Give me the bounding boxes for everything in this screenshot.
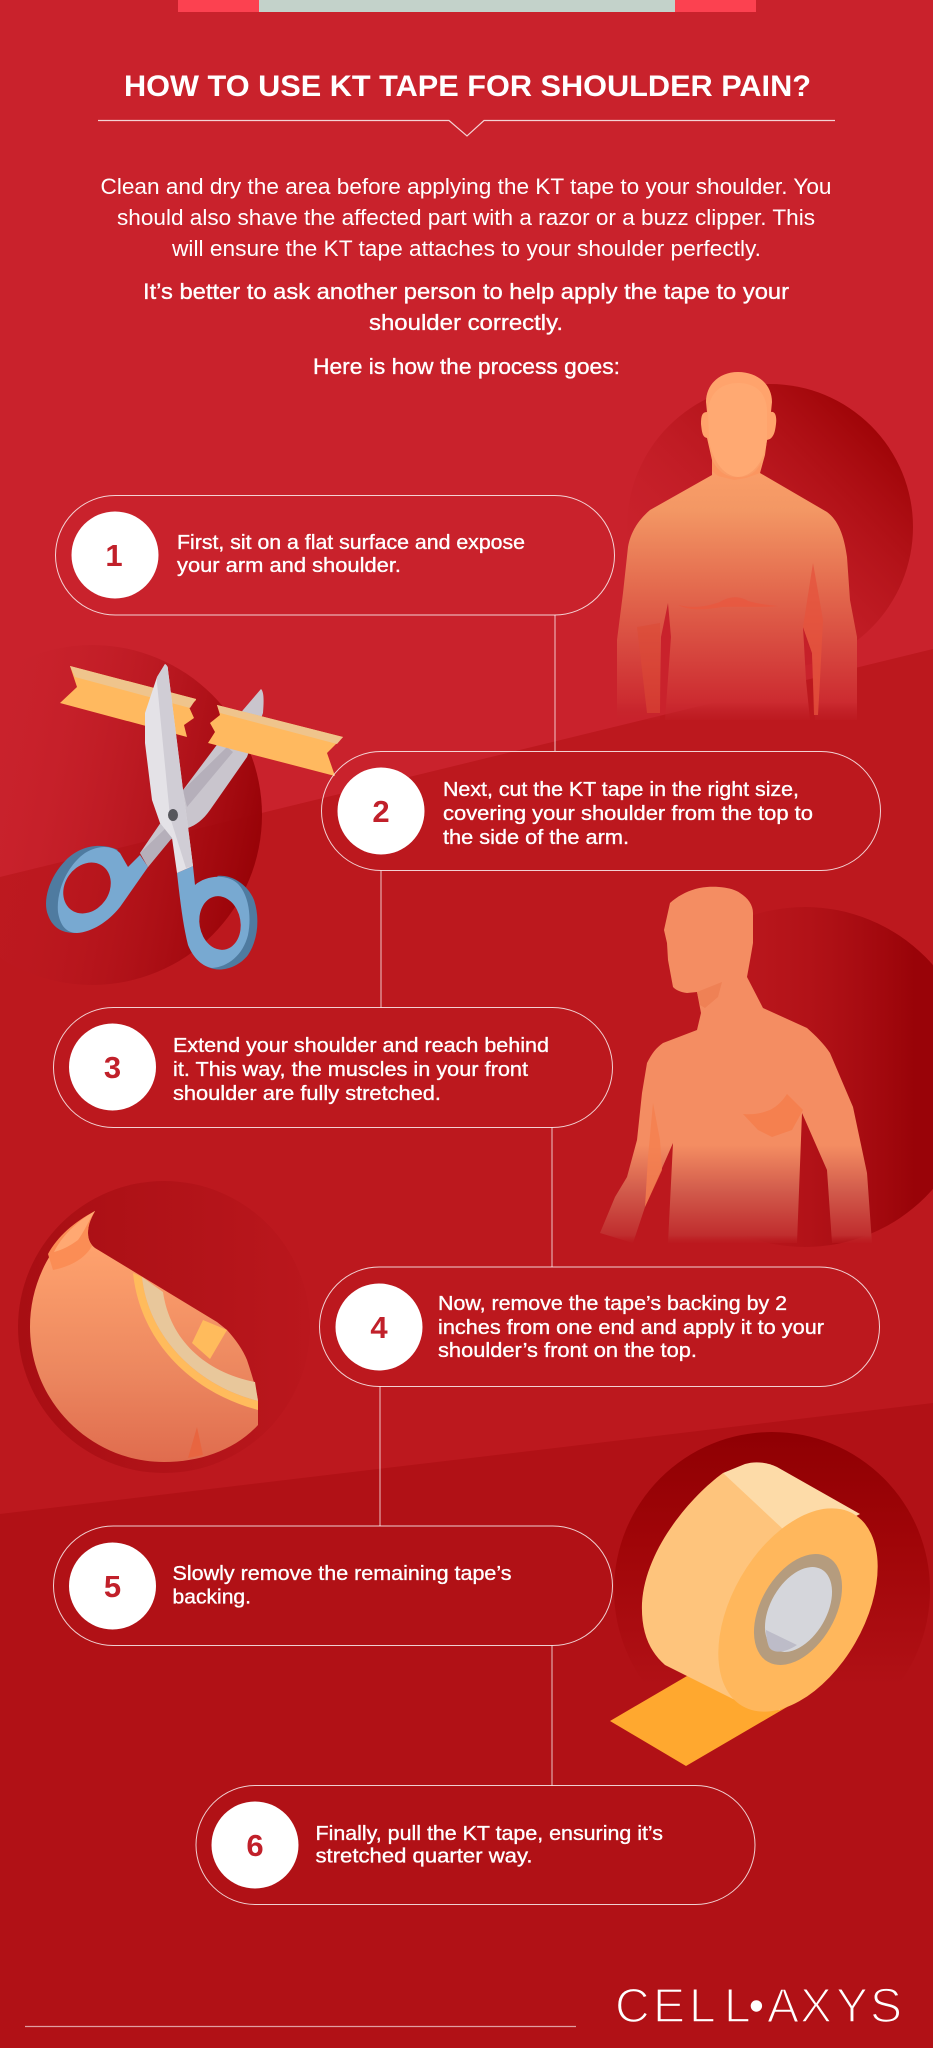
step 3: 3	[104, 1050, 121, 1085]
step 3	[54, 1008, 612, 1128]
front blade	[145, 664, 193, 873]
intro text: should also shave the affected part with a razor or a buzz clipper. This	[117, 205, 815, 230]
step 4: inches from one end and apply it to your	[438, 1316, 824, 1339]
step 4: Now, remove the tape’s backing by 2	[438, 1292, 787, 1315]
step 1	[56, 496, 614, 615]
illustration: scissors cutting tape	[46, 648, 343, 984]
left handle	[46, 846, 148, 933]
right handle	[177, 866, 257, 970]
intro text: It’s better to ask another person to help apply the tape to your	[143, 279, 790, 304]
illustration: front-facing man	[617, 372, 913, 720]
step 3: it. This way, the muscles in your front	[173, 1058, 528, 1081]
footer line	[25, 2026, 576, 2028]
tape on shoulder	[133, 1273, 258, 1410]
step 2: Next, cut the KT tape in the right size,	[443, 778, 799, 801]
illustration: tape roll	[610, 1432, 930, 1766]
intro text: shoulder correctly.	[369, 310, 563, 335]
step 3: shoulder are fully stretched.	[173, 1082, 441, 1105]
step 2	[322, 752, 880, 870]
step 5: 5	[104, 1569, 121, 1604]
roll barrel	[642, 1473, 800, 1710]
step 4	[320, 1267, 880, 1386]
step 5: backing.	[172, 1586, 251, 1608]
title divider with notch	[98, 120, 835, 136]
intro text: Clean and dry the area before applying the KT tape to your shoulder. You	[100, 174, 832, 199]
step 1: your arm and shoulder.	[177, 554, 401, 577]
step 2: 2	[372, 794, 390, 829]
pivot	[168, 809, 178, 821]
step 6: Finally, pull the KT tape, ensuring it’s	[316, 1822, 663, 1845]
step 4: 4	[370, 1310, 388, 1345]
left tape	[60, 666, 196, 737]
step 1: 1	[105, 538, 123, 573]
step connectors	[380, 615, 555, 1786]
step 2: covering your shoulder from the top to	[443, 802, 813, 825]
intro text	[100, 174, 832, 379]
intro text: Here is how the process goes:	[313, 354, 620, 379]
step 3: Extend your shoulder and reach behind	[173, 1034, 549, 1057]
step 6: stretched quarter way.	[316, 1844, 532, 1868]
right tape	[208, 705, 343, 776]
step 1: First, sit on a flat surface and expose	[177, 531, 525, 554]
tape strip	[610, 1676, 787, 1766]
intro text: will ensure the KT tape attaches to your shoulder perfectly.	[171, 236, 761, 261]
step 5	[54, 1526, 612, 1646]
back blade	[140, 689, 264, 867]
step 6: 6	[246, 1828, 264, 1863]
roll core	[736, 1539, 860, 1680]
illustration: side-view man	[600, 887, 933, 1247]
top colour bar	[178, 0, 756, 12]
roll top highlight	[723, 1462, 860, 1545]
step 4: shoulder’s front on the top.	[438, 1339, 697, 1362]
step 5: Slowly remove the remaining tape’s	[172, 1562, 512, 1585]
roll front face	[685, 1481, 911, 1739]
step 2: the side of the arm.	[443, 826, 629, 849]
title: HOW TO USE KT TAPE FOR SHOULDER PAIN?	[124, 70, 811, 103]
illustration: shoulder with tape applied	[18, 1181, 310, 1473]
step 6	[196, 1786, 755, 1904]
logo: CELL•AXYS	[615, 1980, 902, 2033]
